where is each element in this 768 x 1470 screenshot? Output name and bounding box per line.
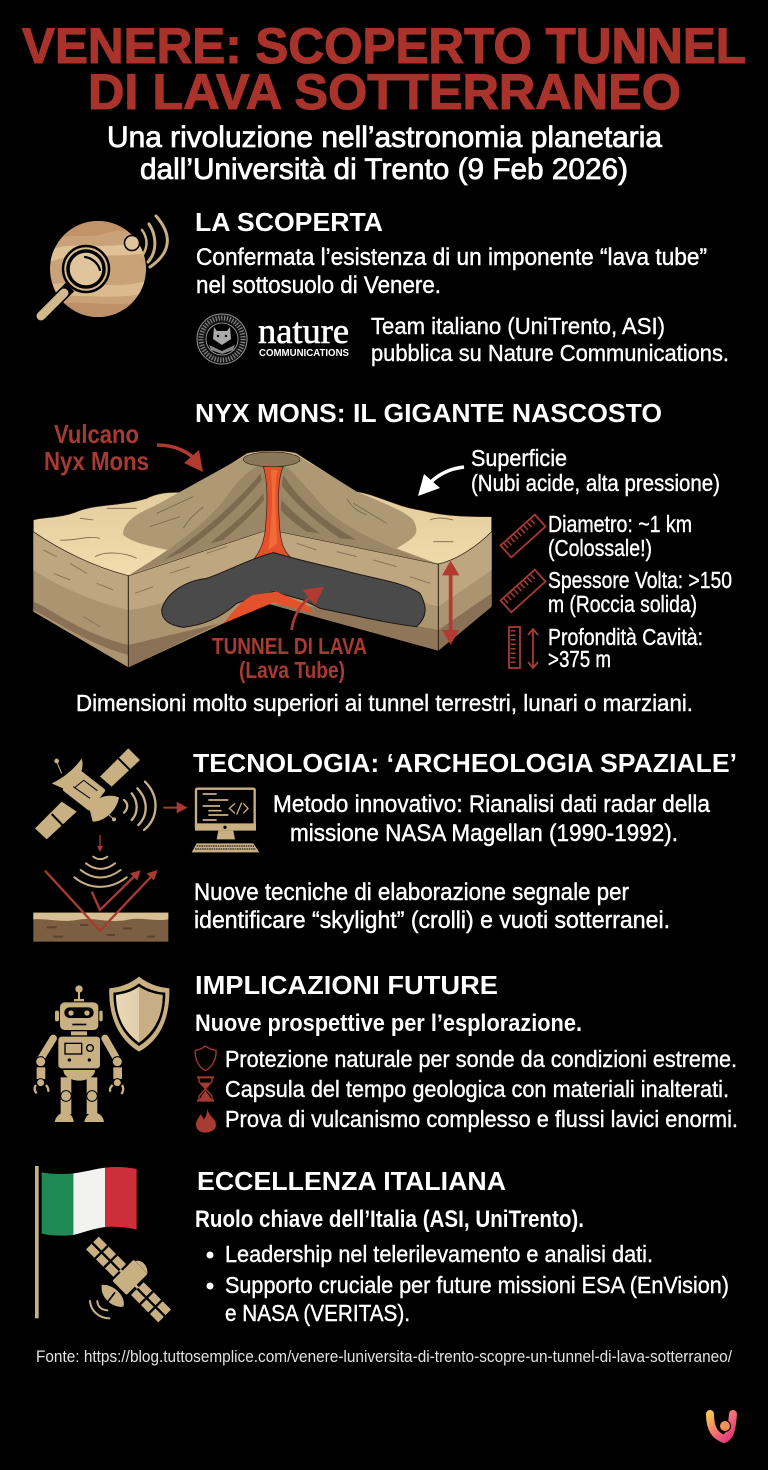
text block: method (273, 791, 711, 847)
text block: team (371, 313, 729, 366)
icon: venus with magnifier (40, 216, 167, 320)
icon: robot and shield (35, 977, 216, 1133)
label: vulcano (44, 419, 149, 476)
label: tunnel: (Lava Tube) (239, 657, 345, 683)
left outer face (33, 532, 128, 667)
panel: la scoperta (40, 207, 729, 366)
text block: techniques: Nuove tecniche di elaborazione segnale per (194, 879, 629, 906)
stat: vault thickness: Spessore Volta: >150 (548, 567, 732, 593)
list: bullets: Leadership nel telerilevamento e analisi dati. (225, 1241, 653, 1267)
right outer face (438, 532, 492, 651)
icon: ruler 1 (501, 515, 545, 557)
satellite (86, 1237, 171, 1322)
icon: ruler 2 (501, 570, 545, 612)
subheading: Ruolo chiave dell’Italia (ASI, UniTrento). (195, 1206, 584, 1233)
stat: diameter: (Colossale!) (548, 535, 652, 561)
label: vulcano: Nyx Mons (44, 446, 149, 476)
label: vulcano: Vulcano (54, 419, 139, 449)
stat: diameter: Diametro: ~1 km (548, 511, 692, 537)
panel: nyx mons (33, 398, 732, 716)
arrow: to computer (163, 802, 188, 813)
stat: cavity depth: Profondità Cavità: (548, 624, 703, 650)
subtitle (107, 121, 662, 186)
title: DI LAVA SOTTERRANEO (88, 64, 681, 120)
arrow: depth (442, 561, 459, 645)
stat: cavity depth: >375 m (548, 646, 611, 672)
panel: eccellenza italiana (35, 1166, 729, 1326)
logo: nature communications: COMMUNICATIONS (259, 347, 349, 359)
list: bullets: e NASA (VERITAS). (225, 1300, 410, 1326)
satellite (35, 748, 140, 839)
text block: team: Team italiano (UniTrento, ASI) (371, 313, 665, 339)
computer (192, 789, 259, 852)
logo: university seal (197, 314, 247, 364)
text block: techniques (194, 879, 670, 934)
arrow: down (97, 835, 103, 852)
icon: hourglass (197, 1077, 214, 1101)
text block: method: Metodo innovativo: Rianalisi dati radar della (273, 791, 711, 818)
signal arcs (90, 1301, 109, 1318)
icon: flame (196, 1108, 216, 1133)
text block: Confermata l’esistenza di un imponente “lava tube” (196, 244, 707, 271)
list: bullets (206, 1241, 729, 1326)
heading: ECCELLENZA ITALIANA (197, 1166, 506, 1196)
lava conduit (250, 467, 290, 563)
inner flank (132, 465, 437, 573)
icon: small shield (195, 1046, 216, 1071)
volcano cross-section diagram (33, 451, 492, 667)
label: tunnel (212, 633, 367, 683)
subheading: Nuove prospettive per l’esplorazione. (195, 1010, 582, 1037)
panel: tecnologia (33, 748, 737, 942)
text block: team: pubblica su Nature Communications. (371, 340, 729, 366)
arrow: to tunnel (292, 587, 324, 630)
list: implications: Protezione naturale per sonde da condizioni estreme. (225, 1046, 737, 1072)
text block: method: missione NASA Magellan (1990-1992). (290, 820, 678, 847)
caption: Dimensioni molto superiori ai tunnel terrestri, lunari o marziani. (76, 690, 693, 716)
arrow: to volcano (157, 445, 203, 472)
ground (33, 913, 168, 942)
label: surface: (Nubi acide, alta pressione) (471, 470, 720, 496)
title: VENERE: SCOPERTO TUNNEL (22, 18, 746, 74)
heading: NYX MONS: IL GIGANTE NASCOSTO (195, 398, 662, 428)
heading: IMPLICAZIONI FUTURE (195, 970, 498, 1000)
logo: nature communications: nature (258, 311, 349, 351)
lava flow (223, 592, 313, 623)
shield (109, 977, 169, 1052)
surface (33, 451, 492, 576)
text block: nel sottosuolo di Venere. (196, 272, 441, 299)
robot (35, 985, 123, 1122)
icon: flag and satellite (35, 1166, 171, 1322)
stat: vault thickness (548, 567, 732, 617)
subtitle: Una rivoluzione nell’astronomia planetaria (107, 121, 662, 154)
label: surface (471, 445, 720, 496)
stat: diameter (548, 511, 692, 561)
logo: brand mark (710, 1414, 733, 1439)
reflected radar rays (45, 870, 158, 931)
heading: LA SCOPERTA (195, 207, 383, 237)
text block (196, 244, 707, 299)
stat: cavity depth (548, 624, 703, 672)
panel: implicazioni future (35, 970, 738, 1133)
label: surface: Superficie (471, 445, 567, 471)
surface cracks (60, 508, 453, 558)
list: implications (225, 1046, 738, 1132)
title (22, 18, 746, 120)
stat: vault thickness: m (Roccia solida) (548, 591, 697, 617)
label: tunnel: TUNNEL DI LAVA (212, 633, 367, 659)
flag (35, 1166, 137, 1318)
list: bullets: Supporto cruciale per future missioni ESA (EnVision) (225, 1272, 729, 1298)
arrow: to surface (418, 467, 464, 496)
heading: TECNOLOGIA: ‘ARCHEOLOGIA SPAZIALE’ (193, 748, 737, 778)
text block: techniques: identificare “skylight” (crolli) e vuoti sotterranei. (194, 907, 670, 934)
icon: vertical ruler and arrow (509, 627, 538, 668)
radar waves (74, 857, 127, 887)
cut face (128, 532, 438, 667)
mountain slope (123, 455, 438, 576)
list: implications: Capsula del tempo geologica con materiali inalterati. (225, 1076, 729, 1102)
signal arcs (124, 782, 156, 830)
crater (243, 452, 300, 467)
subtitle: dall’Università di Trento (9 Feb 2026) (140, 153, 628, 186)
icon: satellite, radar and computer (33, 748, 259, 942)
list: implications: Prova di vulcanismo complesso e flussi lavici enormi. (225, 1106, 738, 1132)
lava tunnel (162, 553, 425, 627)
